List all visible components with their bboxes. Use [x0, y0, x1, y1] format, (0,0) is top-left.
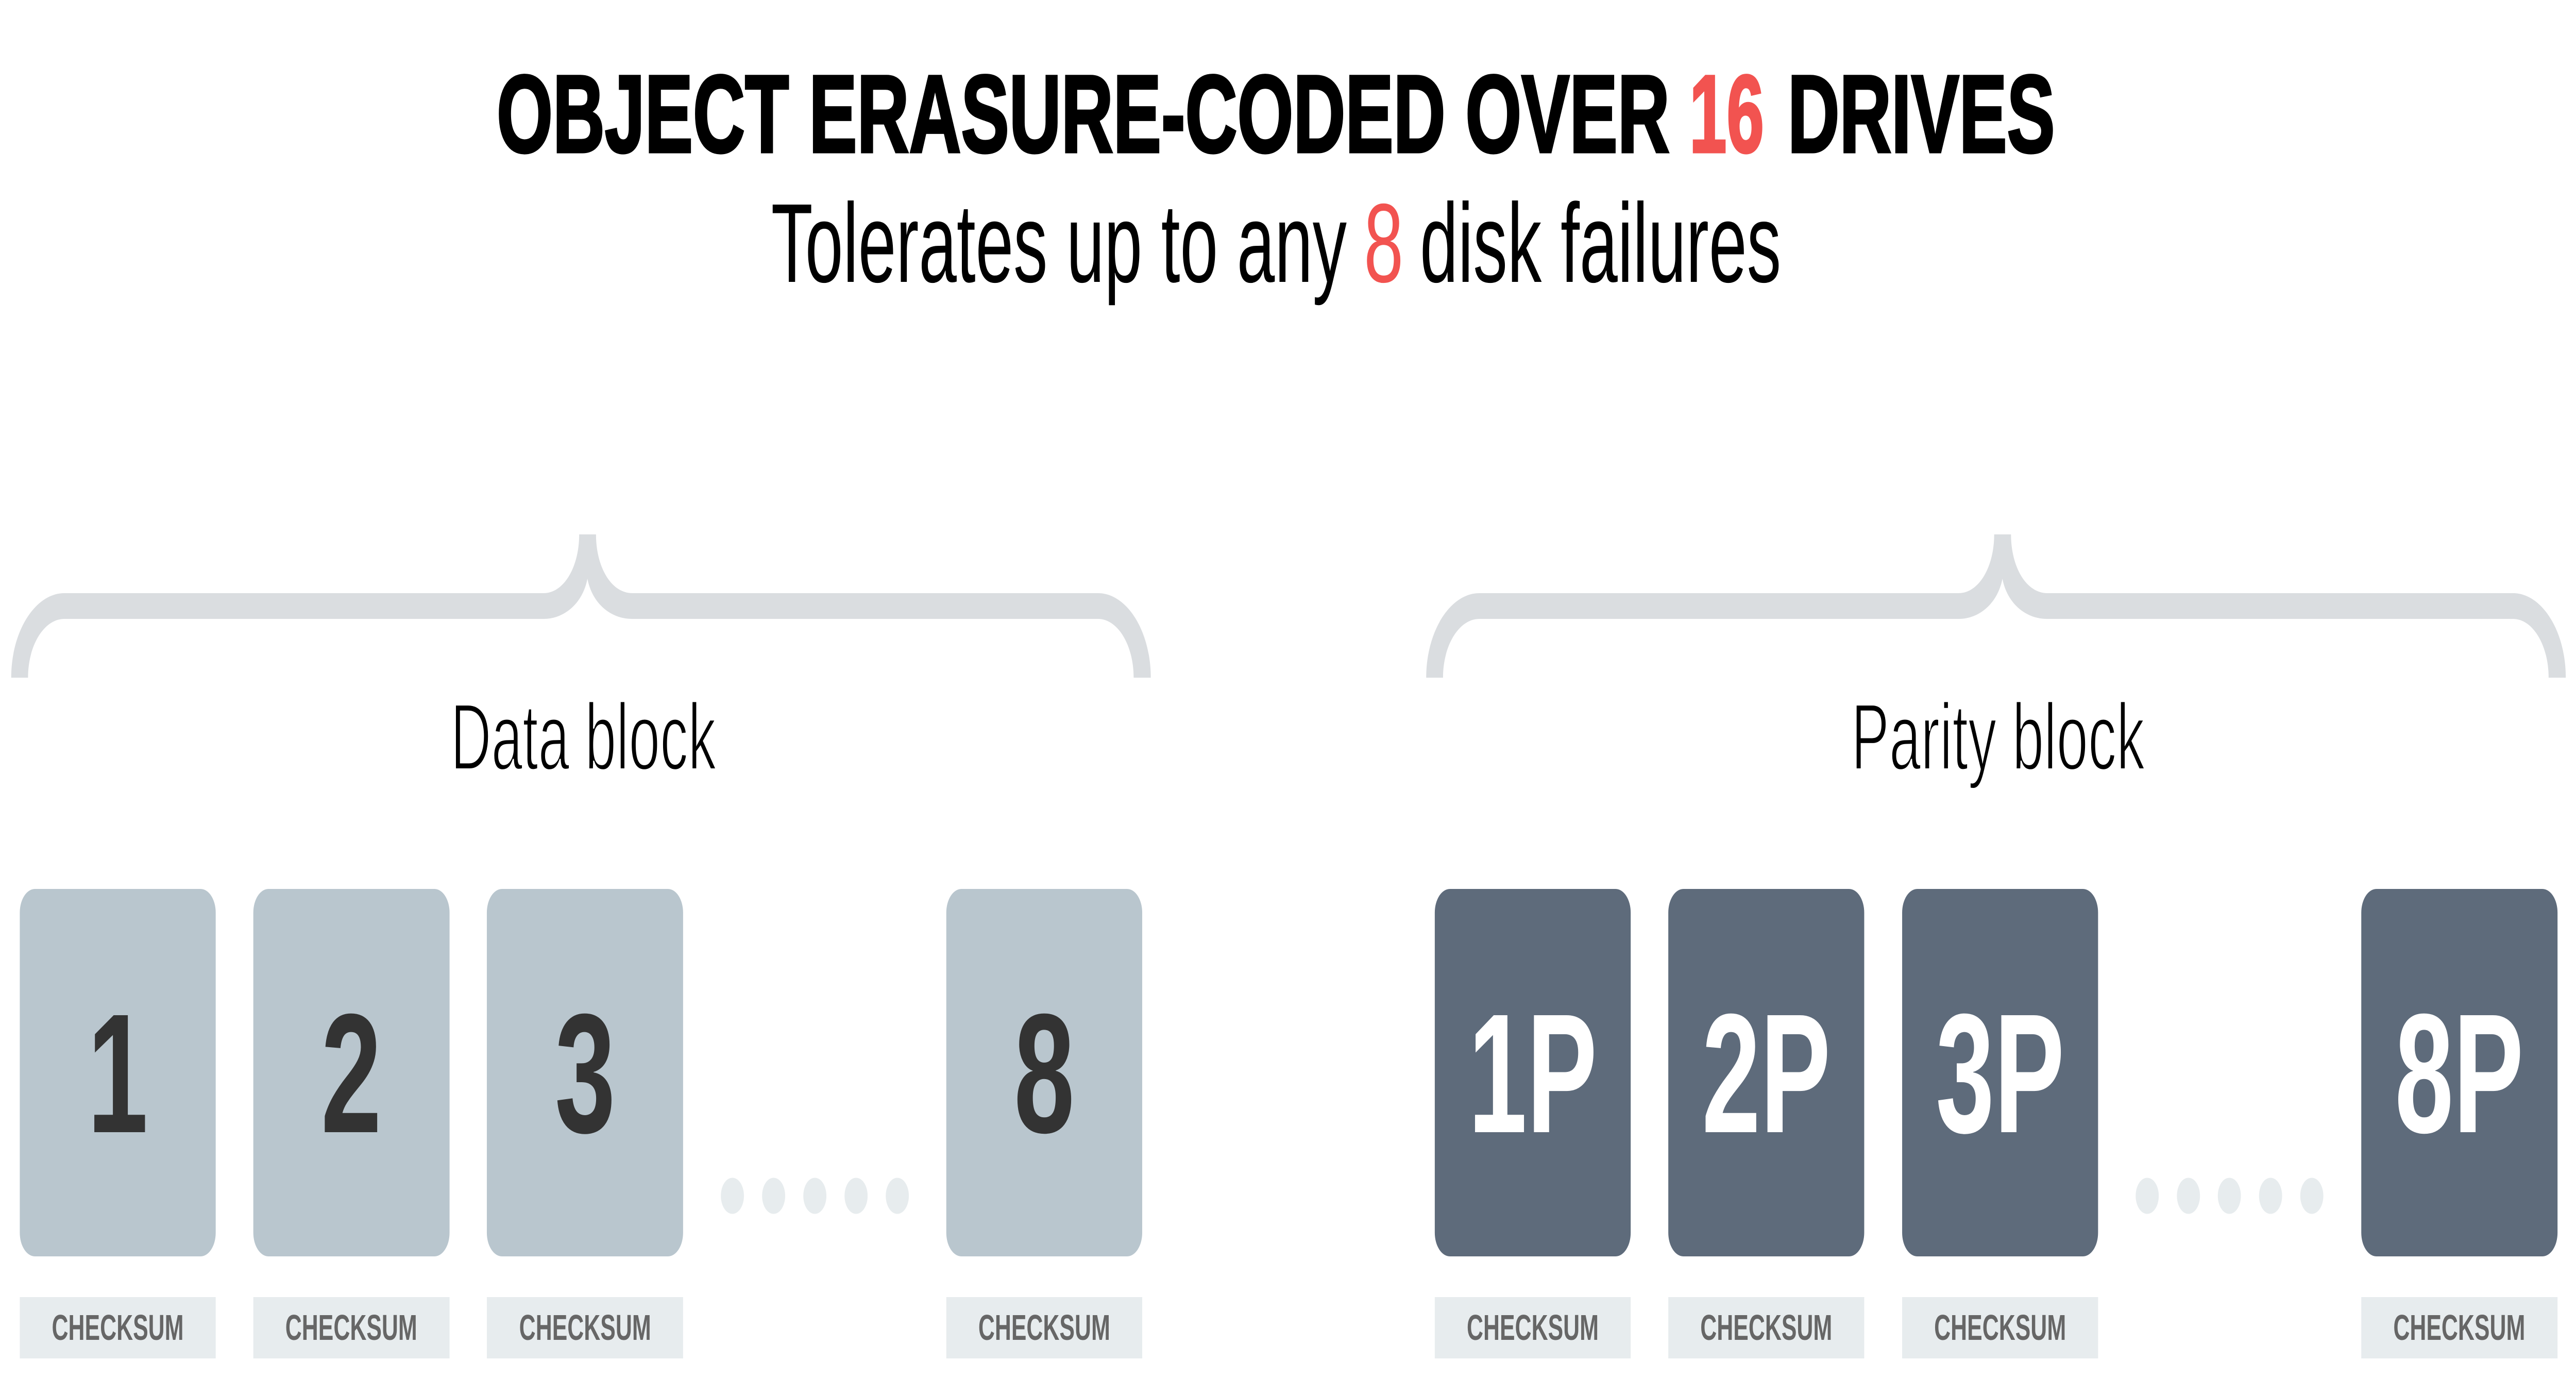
checksum 2P — [1668, 1297, 1864, 1358]
checksum 8 — [946, 1297, 1142, 1358]
title: DRIVES — [1788, 53, 2055, 176]
checksum 1 — [20, 1297, 216, 1358]
data drive 8: 8 — [1014, 978, 1075, 1168]
subtitle: Tolerates up to any — [771, 180, 1347, 306]
label: data block: Data block — [451, 684, 717, 789]
checksum 2: CHECKSUM — [285, 1308, 417, 1348]
checksum 2 — [253, 1297, 450, 1358]
parity drive 2P: 2P — [1702, 978, 1831, 1168]
data drive 3: 3 — [555, 978, 615, 1168]
checksum 1P: CHECKSUM — [1467, 1308, 1599, 1348]
checksum 3P — [1902, 1297, 2098, 1358]
parity drive 8P — [2361, 889, 2557, 1256]
checksum 3 — [487, 1297, 683, 1358]
ellipsis dots: parity — [2136, 1178, 2324, 1214]
brace: parity block — [1426, 534, 2566, 678]
data drive 2 — [253, 889, 450, 1256]
data drive 2: 2 — [321, 978, 382, 1168]
checksum 8: CHECKSUM — [978, 1308, 1110, 1348]
checksum 2P: CHECKSUM — [1700, 1308, 1832, 1348]
subtitle: disk failures — [1420, 180, 1781, 306]
title: OBJECT ERASURE-CODED OVER — [497, 53, 1670, 176]
data drive 1: 1 — [88, 978, 148, 1168]
checksum 3P: CHECKSUM — [1934, 1308, 2066, 1348]
parity drive 2P — [1668, 889, 1864, 1256]
parity drive 8P: 8P — [2395, 978, 2523, 1168]
brace: data block — [11, 534, 1151, 678]
checksum 1: CHECKSUM — [52, 1308, 184, 1348]
parity drive 1P: 1P — [1468, 978, 1597, 1168]
parity drive 1P — [1435, 889, 1631, 1256]
checksum 1P — [1435, 1297, 1631, 1358]
checksum 8P: CHECKSUM — [2393, 1308, 2525, 1348]
parity drive 3P: 3P — [1936, 978, 2064, 1168]
title: 16 — [1689, 53, 1764, 176]
checksum 8P — [2361, 1297, 2557, 1358]
parity drive 3P — [1902, 889, 2098, 1256]
data drive 8 — [946, 889, 1142, 1256]
ellipsis dots: data — [721, 1178, 909, 1214]
checksum 3: CHECKSUM — [519, 1308, 651, 1348]
data drive 1 — [20, 889, 216, 1256]
data drive 3 — [487, 889, 683, 1256]
label: parity block: Parity block — [1851, 684, 2145, 789]
subtitle — [771, 180, 1781, 306]
subtitle: 8 — [1364, 180, 1403, 306]
